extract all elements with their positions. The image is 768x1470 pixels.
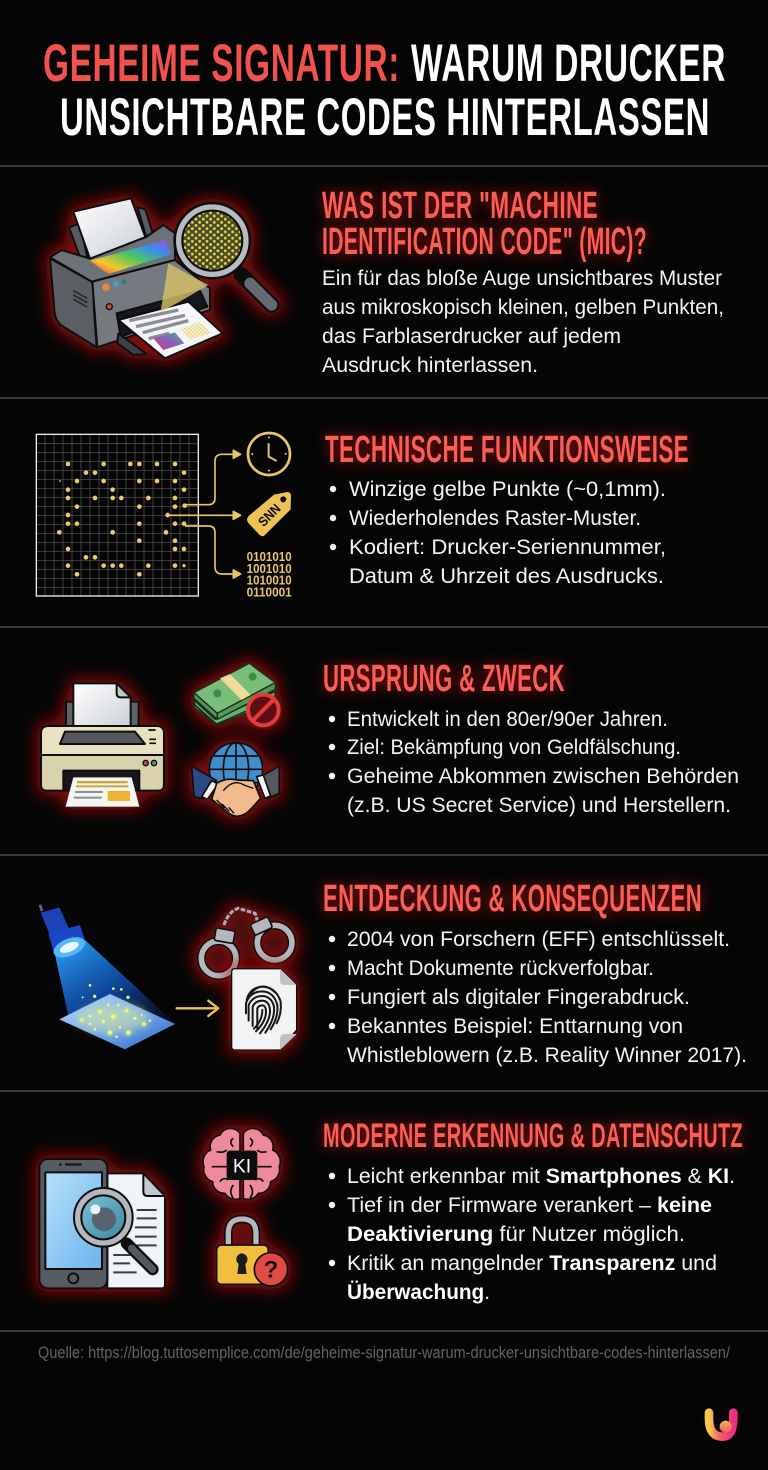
bullet list: Bekanntes Beispiel: Enttarnung von: [347, 1014, 683, 1038]
icon: AI brain: [203, 1128, 280, 1199]
icon: logo: [709, 1413, 733, 1437]
icon: money with prohibition sign: [193, 663, 279, 725]
title: GEHEIME SIGNATUR:: [43, 34, 400, 93]
bullet list: [329, 927, 747, 1067]
icon: serial number tag: SNN: [255, 501, 284, 529]
bullet list: Datum & Uhrzeit des Ausdrucks.: [349, 564, 664, 588]
bullet list: Überwachung.: [347, 1279, 490, 1304]
bullet list: Entwickelt in den 80er/90er Jahren.: [347, 707, 668, 731]
chart: dot grid with decoded data: [36, 433, 292, 600]
bullet list: Geheime Abkommen zwischen Behörden: [347, 764, 739, 788]
text block: Ausdruck hinterlassen.: [322, 353, 538, 377]
binary code: 0101010: [247, 549, 292, 564]
arrows: [167, 450, 241, 578]
heading: [322, 185, 647, 263]
arrow: [177, 1001, 218, 1016]
icon: printer with magnifying glass: [50, 198, 272, 358]
icon: beige printer: [41, 683, 164, 807]
icon: UV flashlight over paper: [39, 904, 175, 1049]
bullet list: Fungiert als digitaler Fingerabdruck.: [347, 985, 690, 1009]
bullet list: Ziel: Bekämpfung von Geldfälschung.: [347, 735, 681, 759]
bullet list: Wiederholendes Raster-Muster.: [349, 506, 641, 530]
icon: smartphone and document with magnifier: [39, 1159, 165, 1288]
bullet list: [329, 1164, 735, 1304]
text block: aus mikroskopisch kleinen, gelben Punkten,: [322, 295, 724, 319]
binary code: 1010010: [247, 573, 292, 588]
binary code: 0110001: [247, 585, 292, 600]
icon: AI brain: KI: [233, 1156, 251, 1177]
heading: URSPRUNG & ZWECK: [323, 658, 565, 700]
title: [43, 34, 726, 147]
icon: fingerprint document: [232, 969, 297, 1050]
bullet list: Macht Dokumente rückverfolgbar.: [347, 956, 654, 980]
icon: serial number tag: [247, 492, 291, 536]
panel: was ist der MIC: [50, 185, 724, 377]
panel: entdeckung und konsequenzen: [39, 878, 747, 1067]
bullet list: Whistleblowern (z.B. Reality Winner 2017).: [347, 1043, 747, 1067]
text block: Ein für das bloße Auge unsichtbares Muster: [322, 266, 722, 290]
icon: clock: [248, 433, 290, 475]
bullet list: Kodiert: Drucker-Seriennummer,: [349, 535, 666, 559]
bullet list: Kritik an mangelnder Transparenz und: [347, 1251, 717, 1275]
bullet list: Tief in der Firmware verankert – keine: [347, 1193, 712, 1217]
panel: technische funktionsweise: [36, 429, 689, 600]
bullet list: [330, 477, 666, 588]
text block: [322, 266, 724, 377]
bullet list: Deaktivierung für Nutzer möglich.: [347, 1222, 685, 1246]
panel: moderne erkennung und datenschutz: [39, 1117, 743, 1304]
bullet list: Winzige gelbe Punkte (~0,1mm).: [349, 477, 666, 501]
bullet list: (z.B. US Secret Service) und Herstellern.: [347, 793, 731, 817]
binary code: [247, 549, 292, 600]
bullet list: 2004 von Forschern (EFF) entschlüsselt.: [347, 927, 730, 951]
icon: padlock with question mark: ?: [264, 1257, 278, 1284]
bullet list: [329, 707, 739, 817]
icon: padlock with question mark: [217, 1219, 288, 1286]
icon: globe and handshake: [192, 743, 279, 816]
binary code: 1001010: [247, 561, 292, 576]
text block: das Farblaserdrucker auf jedem: [322, 324, 621, 348]
icon: handcuffs: [201, 908, 292, 976]
panel: ursprung und zweck: [41, 658, 739, 817]
bullet list: Leicht erkennbar mit Smartphones & KI.: [347, 1164, 735, 1188]
